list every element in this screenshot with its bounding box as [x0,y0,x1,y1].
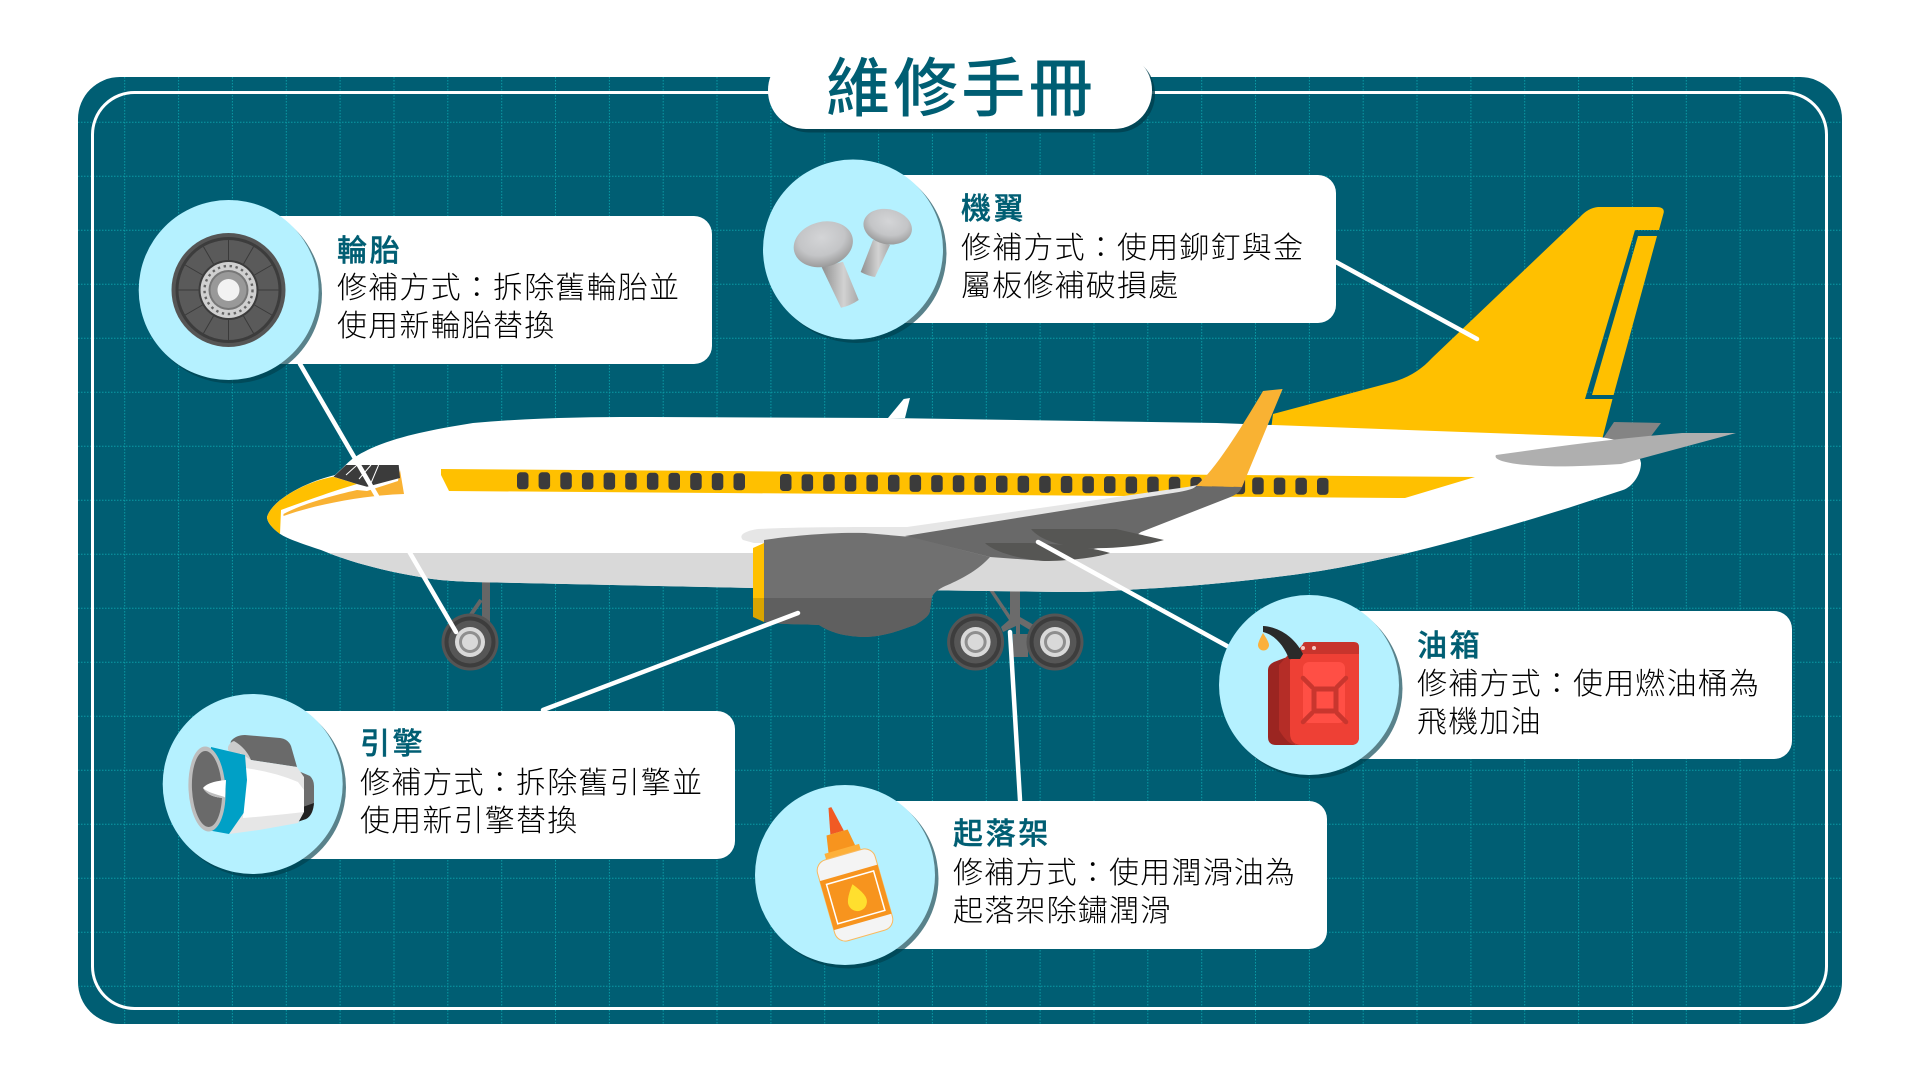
landing gear: main [947,590,1084,670]
wing [905,486,1242,561]
text: engine: 使用新引擎替換 [360,805,578,838]
panel: landing gear [755,785,1327,968]
icon: engine [186,735,314,834]
icon: lubricant bottle [801,799,895,944]
text: wing: 屬板修補破損處 [961,270,1179,303]
text: landing gear: 修補方式：使用潤滑油為 [953,857,1296,890]
text: tire: 使用新輪胎替換 [337,310,555,343]
text: fuel tank [1417,630,1760,739]
panel: engine [163,694,735,878]
panel: wing [763,160,1336,343]
panel: tire [139,200,712,384]
text: fuel tank: 修補方式：使用燃油桶為 [1417,668,1760,701]
icon: fuel can [1258,626,1359,745]
text: wing [961,193,1304,303]
wing upper surface [741,485,1198,543]
text: wing: 機翼 [961,193,1026,226]
cockpit window [334,465,400,487]
text: tire: 輪胎 [337,235,402,268]
text: landing gear [953,818,1296,928]
text: fuel tank: 油箱 [1417,630,1482,663]
panel: fuel tank [1219,595,1792,778]
text: tire [337,235,680,343]
leader lines [300,262,1477,800]
text: landing gear: 起落架除鏽潤滑 [953,895,1171,928]
title banner [768,52,1155,132]
fuselage stripe [441,469,1475,498]
dorsal antenna fin [888,398,910,418]
icon: tire [172,233,286,347]
text: engine [360,728,703,838]
wing flaps [985,529,1164,561]
landing gear: nose [442,580,498,670]
icon: rivets [789,204,915,308]
winglet [1196,389,1283,487]
engine [750,533,990,643]
horizontal stabilizer [1496,433,1736,466]
text: engine: 修補方式：拆除舊引擎並 [360,767,703,800]
nose stripe [267,470,404,534]
text: wing: 修補方式：使用鉚釘與金 [961,232,1304,265]
title banner: 維修手冊 [826,53,1096,125]
text: engine: 引擎 [360,728,425,761]
airplane [260,207,1736,670]
fuselage [267,417,1641,592]
text: landing gear: 起落架 [953,818,1051,851]
passenger windows [517,472,1328,495]
rear stabilizer [1602,422,1661,440]
tail fin [1271,207,1664,440]
text: tire: 修補方式：拆除舊輪胎並 [337,272,680,305]
text: fuel tank: 飛機加油 [1417,706,1542,739]
